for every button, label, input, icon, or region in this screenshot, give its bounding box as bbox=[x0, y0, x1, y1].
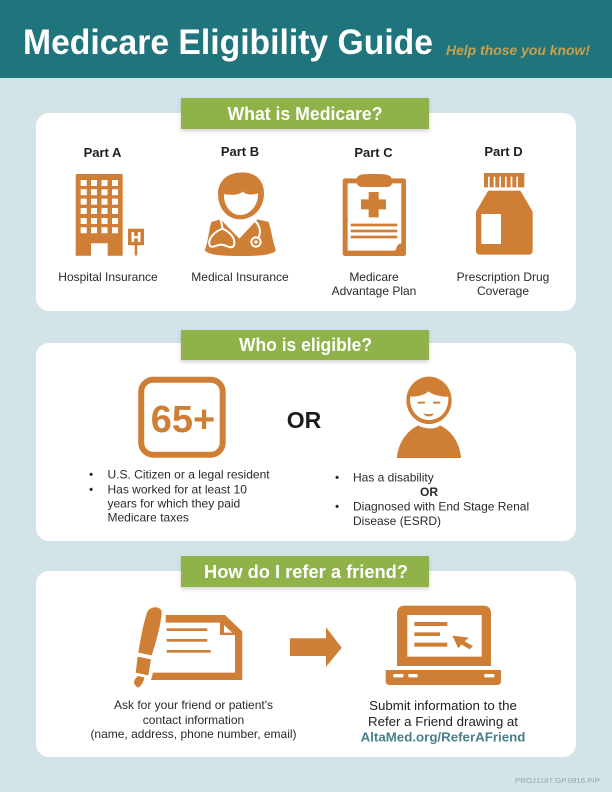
icon: person bbox=[397, 377, 461, 458]
title: Medicare Eligibility Guide bbox=[23, 23, 433, 62]
icon: hospital bbox=[76, 174, 144, 256]
tagline: Help those you know! bbox=[446, 43, 591, 58]
heading: who is eligible bbox=[181, 330, 429, 360]
part A label: Part A bbox=[84, 145, 122, 160]
OR divider: OR bbox=[287, 407, 322, 433]
panel: what is Medicare bbox=[36, 98, 576, 311]
list: disability requirements: • bbox=[335, 471, 339, 485]
icon: clipboard bbox=[343, 174, 406, 256]
list: disability requirements: OR bbox=[420, 485, 438, 499]
label: prescription drug coverage bbox=[457, 270, 549, 298]
list: age 65 requirements: • bbox=[89, 482, 93, 496]
text: submit information: AltaMed.org/ReferAFriend bbox=[361, 730, 525, 744]
text: ask for contact information: Ask for your friend or patient's bbox=[114, 698, 273, 712]
list: age 65 requirements bbox=[89, 468, 270, 525]
list: age 65 requirements: years for which they paid bbox=[108, 496, 240, 510]
panel: how do I refer a friend bbox=[36, 556, 576, 757]
label: prescription drug coverage: Coverage bbox=[477, 284, 529, 298]
icon: laptop bbox=[386, 606, 501, 685]
list: disability requirements: Disease (ESRD) bbox=[353, 514, 441, 528]
icon: pen and document bbox=[134, 607, 242, 688]
list: disability requirements bbox=[335, 471, 529, 528]
label: prescription drug coverage: Prescription Drug bbox=[457, 270, 549, 284]
list: disability requirements: Has a disability bbox=[353, 471, 434, 485]
icon: 65+ badge: 65+ bbox=[151, 399, 215, 441]
heading: how do I refer a friend bbox=[181, 556, 429, 587]
part C label: Part C bbox=[354, 145, 393, 160]
heading: what is Medicare: What is Medicare? bbox=[228, 104, 382, 124]
text: ask for contact information bbox=[90, 698, 297, 741]
text: submit information: Refer a Friend drawing at bbox=[368, 714, 518, 729]
text: ask for contact information: contact information bbox=[143, 713, 244, 727]
icon: 65+ badge bbox=[141, 380, 223, 455]
list: age 65 requirements: Medicare taxes bbox=[108, 511, 189, 525]
icon: medicine bottle bbox=[476, 173, 533, 255]
label: medical insurance: Medical Insurance bbox=[191, 270, 289, 284]
label: medicare advantage plan: Medicare bbox=[349, 270, 399, 284]
label: hospital insurance: Hospital Insurance bbox=[58, 270, 158, 284]
icon: doctor bbox=[205, 172, 276, 256]
list: age 65 requirements: • bbox=[89, 468, 93, 482]
list: age 65 requirements: U.S. Citizen or a legal resident bbox=[108, 468, 270, 482]
label: medicare advantage plan bbox=[332, 270, 416, 298]
part B label: Part B bbox=[221, 144, 259, 159]
footer code: PROJ1187.GP.0916.PIP bbox=[515, 776, 600, 785]
heading: how do I refer a friend: How do I refer a friend? bbox=[204, 562, 408, 582]
heading: what is Medicare bbox=[181, 98, 429, 129]
heading: who is eligible: Who is eligible? bbox=[239, 335, 372, 355]
text: submit information bbox=[361, 698, 525, 744]
part D label: Part D bbox=[484, 144, 523, 159]
label: medicare advantage plan: Advantage Plan bbox=[332, 284, 416, 298]
text: ask for contact information: (name, address, phone number, email) bbox=[90, 727, 297, 741]
text: submit information: Submit information to the bbox=[369, 698, 517, 713]
panel: who is eligible bbox=[36, 330, 576, 541]
arrow bbox=[290, 627, 342, 667]
header band bbox=[0, 0, 612, 78]
list: age 65 requirements: Has worked for at least 10 bbox=[108, 482, 247, 496]
list: disability requirements: • bbox=[335, 500, 339, 514]
list: disability requirements: Diagnosed with End Stage Renal bbox=[353, 500, 529, 514]
